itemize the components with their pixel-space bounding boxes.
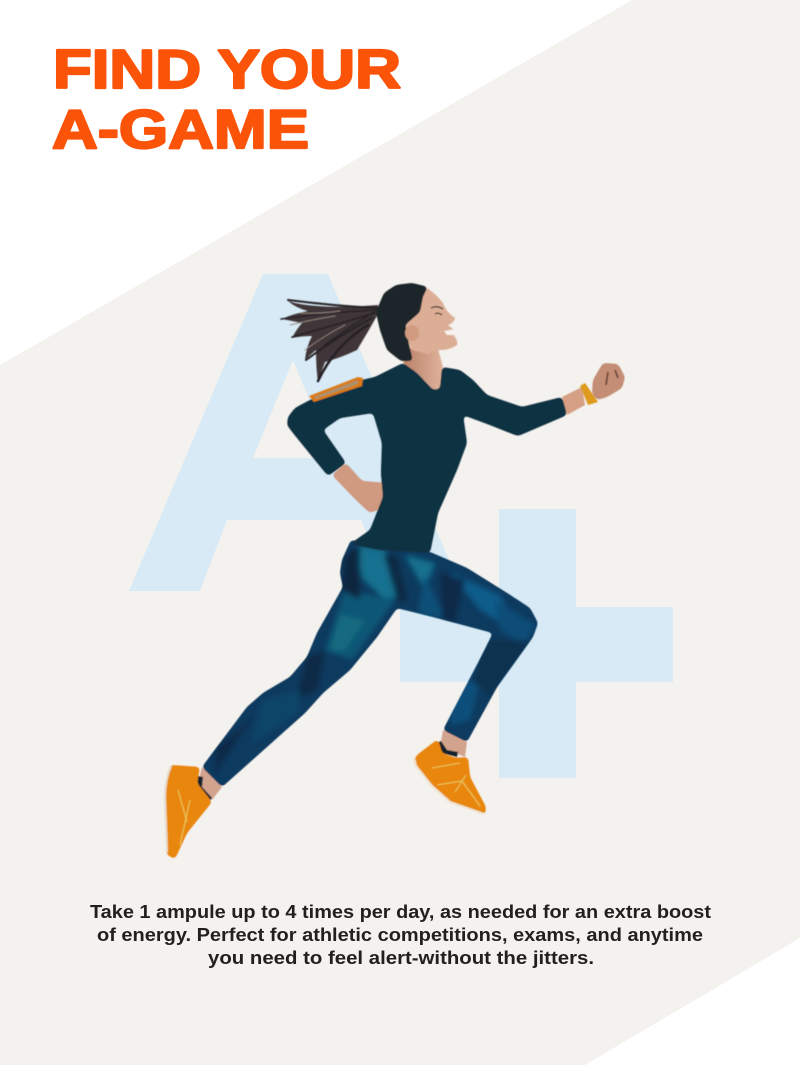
shirt and sleeves (287, 363, 567, 553)
description text: you need to feel alert-without the jitters. (208, 948, 594, 968)
right fist (592, 363, 625, 400)
description text: of energy. Perfect for athletic competitions, exams, and anytime (97, 925, 703, 945)
neck (403, 345, 443, 390)
rear shoe (165, 765, 212, 859)
face (402, 288, 457, 354)
ear (405, 325, 419, 341)
socks (437, 741, 458, 757)
description text: Take 1 ampule up to 4 times per day, as needed for an extra boost (90, 902, 711, 922)
front shoe (413, 739, 486, 815)
hair (376, 283, 428, 361)
runner photo illustration (165, 283, 625, 859)
arm band (309, 377, 363, 402)
white diagonal corner: top left (0, 0, 632, 365)
title: A-GAME (52, 98, 309, 160)
brow and eye (431, 307, 443, 315)
ankle skin (440, 730, 467, 757)
title (52, 38, 401, 160)
wrist band (580, 383, 598, 405)
right forearm (562, 387, 585, 415)
ponytail (281, 300, 378, 382)
large pale blue A+ (129, 274, 673, 778)
white diagonal corner: bottom right (585, 938, 800, 1065)
title: FIND YOUR (53, 38, 401, 100)
description text (90, 902, 711, 968)
left forearm and hand (332, 463, 394, 513)
leggings (202, 540, 538, 787)
smile (444, 329, 455, 335)
